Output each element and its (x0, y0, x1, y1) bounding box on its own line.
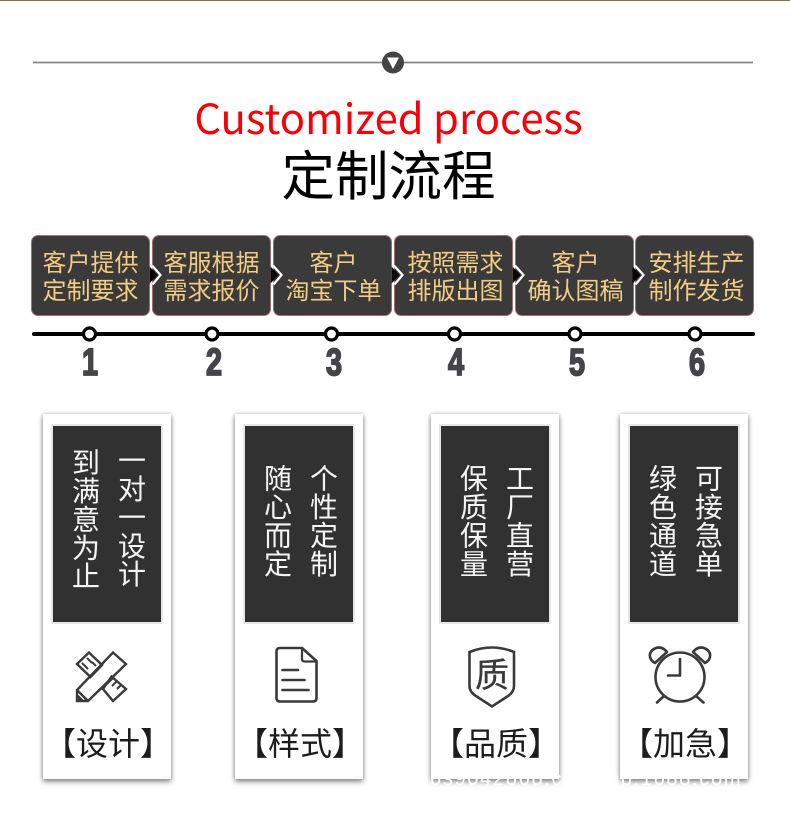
step box 4: 排版出图 (408, 271, 504, 306)
step box 3: 客户 (310, 243, 358, 278)
step number 6: 6 (689, 342, 705, 384)
icon: pencil and ruler (75, 650, 128, 703)
card: design (43, 414, 171, 779)
title: english: Customized process (194, 87, 583, 147)
step number 1: 1 (82, 342, 98, 384)
card: urgent (620, 414, 748, 779)
step box 5 (515, 235, 634, 316)
panel: urgent text: 可接急单 (689, 464, 729, 578)
chevron arrows between steps (150, 264, 645, 286)
step box 1: 客户提供 (42, 243, 138, 278)
step box 1 (31, 235, 150, 316)
title: chinese: 定制流程 (282, 134, 496, 211)
label: design: 【设计】 (44, 719, 172, 765)
watermark text: bs9042868.cn.shop.1688.com (430, 768, 742, 790)
panel: design text (53, 426, 161, 622)
card: style (235, 414, 363, 779)
icon: quality shield: 质 (475, 648, 509, 697)
step box 2: 客服根据 (164, 243, 260, 278)
step number 2: 2 (206, 342, 222, 384)
step number 4: 4 (448, 342, 464, 384)
step box 6 (635, 235, 754, 316)
step box 2 (152, 235, 271, 316)
icon: quality shield (468, 646, 516, 708)
panel: style text (245, 426, 353, 622)
step box 5: 客户 (552, 243, 600, 278)
step box 3: 淘宝下单 (286, 271, 382, 306)
top band (0, 0, 790, 1)
label: style: 【样式】 (236, 719, 364, 765)
panel: quality text: 保质保量 (454, 464, 494, 578)
panel: quality text: 工厂直营 (500, 464, 540, 578)
step box 3 (273, 235, 392, 316)
icon: document (275, 646, 318, 703)
icon: alarm clock (648, 646, 712, 704)
panel: style text: 个性定制 (304, 464, 344, 578)
label: urgent: 【加急】 (621, 719, 749, 765)
step box 2: 需求报价 (164, 271, 260, 306)
step box 5: 确认图稿 (528, 271, 624, 306)
label: quality: 【品质】 (432, 719, 560, 765)
step number 3: 3 (326, 342, 342, 384)
step box 4: 按照需求 (408, 243, 504, 278)
step box 4 (394, 235, 513, 316)
timeline (32, 326, 755, 342)
step box 6: 安排生产 (648, 243, 744, 278)
panel: quality text (441, 426, 549, 622)
panel: style text: 随心而定 (258, 464, 298, 578)
step number 5: 5 (569, 342, 585, 384)
panel: urgent text: 绿色通道 (643, 464, 683, 578)
card: quality (431, 414, 559, 779)
step box 1: 定制要求 (42, 271, 138, 306)
divider with arrow badge (33, 52, 753, 74)
step box 6: 制作发货 (648, 271, 744, 306)
panel: urgent text (630, 426, 738, 622)
panel: design text: 一对一设计 (112, 446, 152, 588)
panel: design text: 到满意为止 (66, 448, 106, 590)
